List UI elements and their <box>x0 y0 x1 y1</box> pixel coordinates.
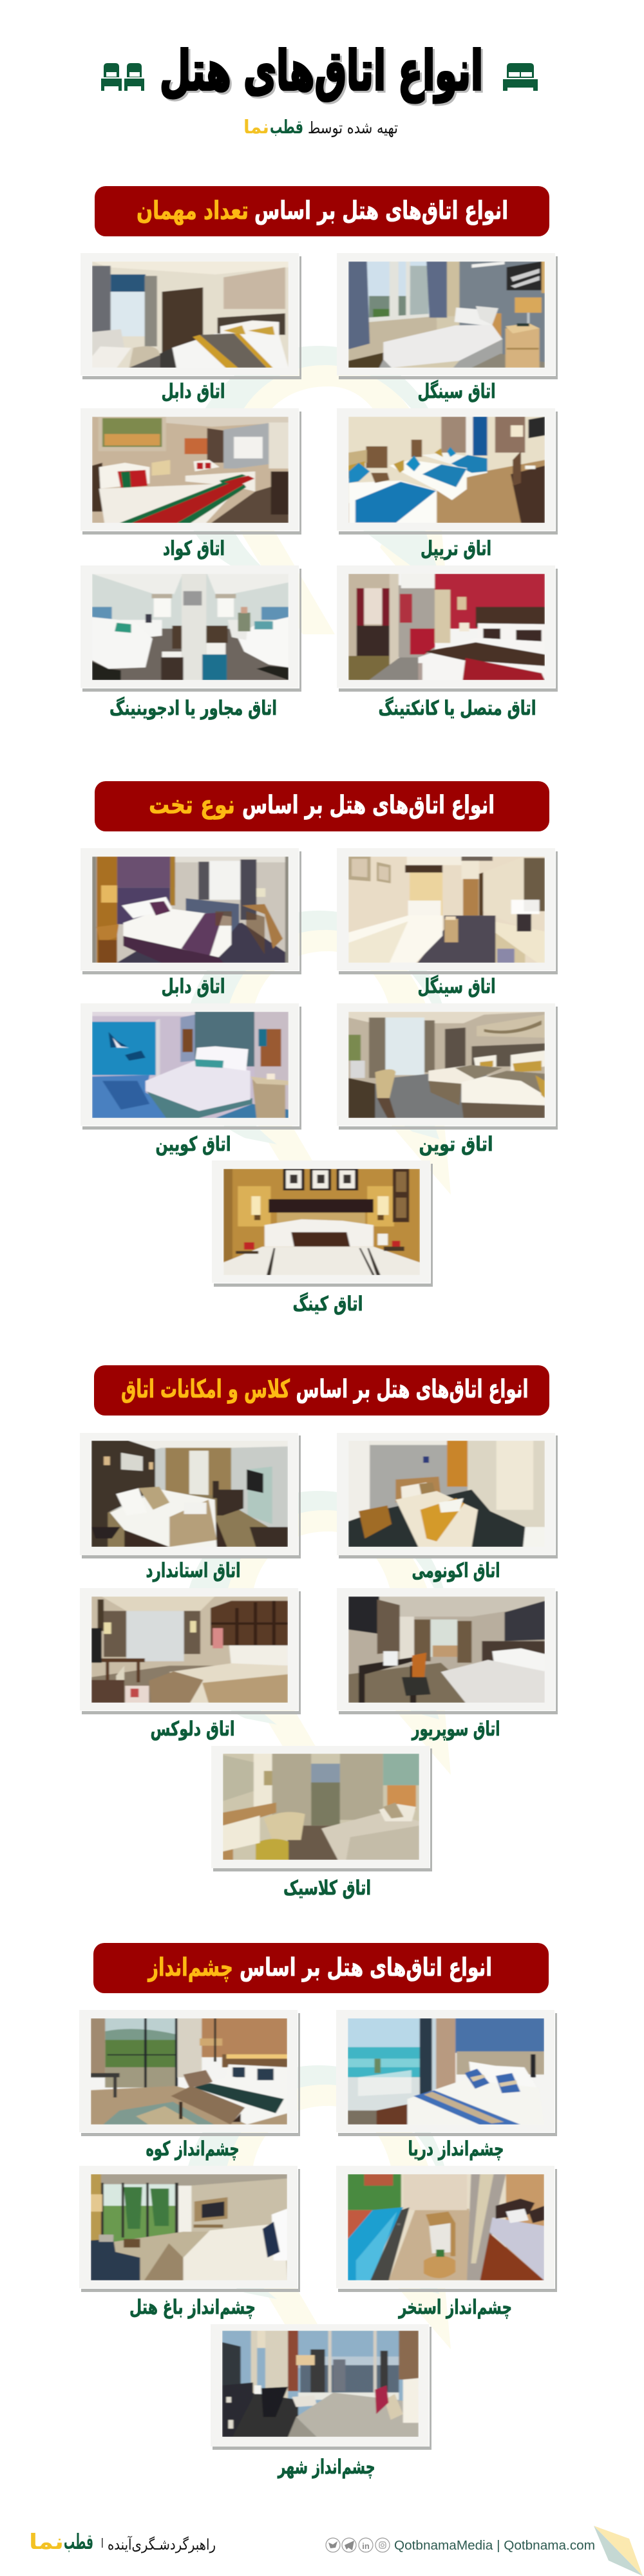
card: standard room <box>80 1433 301 1558</box>
label: چشم‌انداز شهر <box>277 2456 375 2479</box>
banner: by guest count <box>95 186 549 236</box>
banner: by bed type <box>95 781 549 831</box>
banner: by class and amenities: کلاس و امکانات اتاق <box>121 1375 290 1404</box>
label: اتاق متصل یا کانکتینگ <box>379 697 536 720</box>
label: اتاق دابل <box>161 380 225 403</box>
label: چشم‌انداز کوه <box>146 2137 240 2161</box>
card: superior room <box>337 1588 558 1714</box>
subtitle <box>243 116 398 138</box>
label: اتاق سوپریور <box>411 1718 500 1741</box>
subtitle: تهیه شده توسط <box>308 118 398 138</box>
card: economy room <box>337 1433 558 1558</box>
watermark: compass logo section 2 <box>182 911 451 1199</box>
card: triple room <box>337 408 558 535</box>
card: connecting room <box>337 565 558 692</box>
watermark: compass logo section 3 <box>182 1491 451 1779</box>
card: garden view <box>79 2166 300 2292</box>
card: sea view <box>336 2010 557 2136</box>
card: double room (bed type) <box>80 848 301 974</box>
card: classic room <box>211 1746 432 1871</box>
card: quad room <box>80 408 301 535</box>
title: انواع اتاق‌های هتل <box>160 39 483 103</box>
footer: tagline: راهبرگردشـگری‌آینده <box>108 2535 216 2553</box>
footer: corner needle <box>594 2526 643 2576</box>
banner: by class and amenities: انواع اتاق‌های هتل بر اساس <box>296 1375 528 1404</box>
banner: by guest count: انواع اتاق‌های هتل بر اساس <box>254 196 508 225</box>
label: اتاق مجاور یا ادجوینینگ <box>109 697 277 720</box>
label: اتاق دلوکس <box>151 1718 234 1741</box>
subtitle: نما <box>243 116 269 138</box>
banner: by bed type: نوع تخت <box>149 791 235 820</box>
label: چشم‌انداز دریا <box>408 2137 504 2161</box>
banner: by guest count: تعداد مهمان <box>137 196 249 225</box>
label: چشم‌انداز باغ هتل <box>129 2296 256 2319</box>
card: city view <box>211 2324 431 2450</box>
card: deluxe room <box>80 1588 301 1714</box>
footer: brand logo: قطب <box>64 2529 93 2554</box>
title <box>160 39 485 105</box>
banner: by bed type: انواع اتاق‌های هتل بر اساس <box>242 791 495 820</box>
card: twin room <box>337 1003 558 1130</box>
card: single room (bed type) <box>337 848 558 974</box>
banner: by view: چشم‌انداز <box>147 1953 233 1982</box>
card: pool view <box>336 2166 557 2292</box>
banner: by view: انواع اتاق‌های هتل بر اساس <box>240 1953 492 1982</box>
watermark: compass logo section 1 <box>182 346 451 634</box>
label: اتاق کویین <box>156 1133 231 1156</box>
watermark: compass logo section 4 <box>182 2065 451 2354</box>
card: mountain view <box>79 2010 300 2136</box>
label: اتاق توین <box>419 1133 493 1156</box>
card: adjoining room <box>80 565 301 692</box>
footer: brand logo: نما <box>29 2529 64 2554</box>
label: اتاق سینگل <box>417 974 496 998</box>
subtitle: قطب <box>270 116 303 138</box>
icon: double bed <box>503 63 538 91</box>
label: اتاق تریپل <box>421 537 491 560</box>
card: double room <box>80 253 301 379</box>
footer: website and handle: QotbnamaMedia | Qotbnama.com <box>394 2539 595 2553</box>
label: اتاق کینگ <box>292 1293 363 1316</box>
footer: social icons <box>326 2538 390 2552</box>
banner: by class and amenities <box>94 1365 549 1416</box>
footer: social icons: in <box>362 2541 370 2551</box>
banner: by view <box>93 1943 549 1993</box>
label: اتاق سینگل <box>417 379 496 403</box>
label: چشم‌انداز استخر <box>398 2296 512 2319</box>
footer: brand logo <box>29 2529 93 2554</box>
label: اتاق کواد <box>163 537 225 560</box>
card: king room <box>212 1160 433 1287</box>
label: اتاق دابل <box>161 975 225 998</box>
card: queen room <box>80 1003 301 1130</box>
label: اتاق استاندارد <box>146 1559 241 1582</box>
label: اتاق کلاسیک <box>283 1877 371 1900</box>
label: اتاق اکونومی <box>412 1559 500 1582</box>
icon: twin beds <box>101 63 144 91</box>
title: انواع اتاق‌های هتل <box>162 41 485 105</box>
card: single room <box>337 253 558 379</box>
